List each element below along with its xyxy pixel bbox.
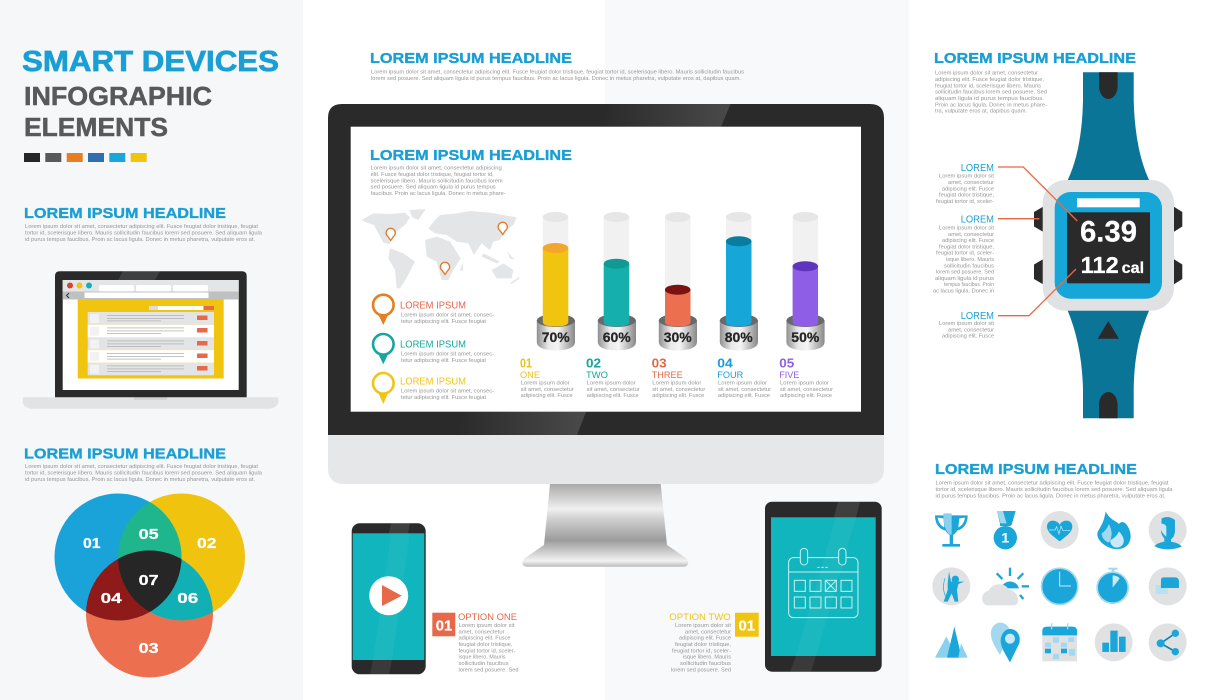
- bar 2: 60%: 02: [586, 356, 601, 370]
- bar 1: 70%: adipiscing elit. Fusce: [521, 393, 573, 399]
- option one: lorem sed posuere. Sed: [458, 667, 518, 673]
- monitor bezel: [328, 104, 884, 435]
- option one: amet, consectetur: [458, 629, 505, 635]
- bar 4: 80%: adipiscing elit. Fusce: [718, 393, 770, 399]
- option one: 01: [436, 618, 452, 634]
- bar 1: 70%: 70%: [542, 329, 570, 345]
- text block: icons section: tortor id, scelerisque libero. Mauris sollicitudin faucibus lorem sed posuere. Sed aliquam ligula: [936, 487, 1173, 493]
- text block: venn section: tortor id, scelerisque libero. Mauris sollicitudin faucibus lorem sed posuere. Sed aliquam ligula: [25, 470, 263, 476]
- option two: amet, consectetur: [685, 629, 731, 635]
- watch readout: cal: [1122, 260, 1144, 277]
- bar 5: 50%: Lorem ipsum dolor: [780, 380, 829, 386]
- text block: icons section: id purus tempus faucibus. Proin ac lacus ligula. Donec in metus pharetra, vulputate eros at.: [936, 494, 1166, 500]
- watch readout: [1080, 216, 1144, 278]
- callout text 2: sollicitudin faucibus: [944, 263, 994, 269]
- text block: smartwatch section: Proin ac lacus ligula. Donec in metus phare-: [935, 102, 1047, 108]
- text block: venn section: LOREM IPSUM HEADLINE: [24, 446, 226, 462]
- text block: smartwatch section: adipiscing elit. Fusce feugiat dolor tristique,: [935, 77, 1044, 83]
- venn diagram: 07: [139, 572, 159, 589]
- bar 3: 30%: Lorem ipsum dolor: [652, 380, 701, 386]
- monitor: [328, 104, 884, 567]
- text block: smartwatch section: aliquam ligula id purus tempus faucibus.: [935, 96, 1044, 102]
- callout text 3: Lorem ipsum dolor sit: [939, 321, 994, 327]
- text block: smartwatch section: feugiat tortor id, scelerisque libero. Mauris: [935, 83, 1041, 89]
- title: SMART DEVICES: [22, 46, 279, 78]
- screen heading: LOREM IPSUM HEADLINE: [370, 147, 572, 164]
- option one: adipiscing elit. Fusce: [458, 636, 510, 642]
- callout text 1: [936, 163, 994, 205]
- screen heading: elit. Fusce feugiat dolor tristique, feugiat tortor id,: [371, 172, 494, 178]
- option one: feugiat dolor tristique,: [458, 642, 513, 648]
- callout text 1: Lorem ipsum dolor sit: [939, 174, 994, 180]
- text block: laptop section: [24, 205, 263, 243]
- text block: smartwatch section: Lorem ipsum dolor sit amet, consectetur: [935, 71, 1038, 77]
- option two: [669, 612, 759, 673]
- callout text 1: amet, consectetur: [948, 180, 994, 186]
- bar 5: 50%: 05: [779, 356, 794, 370]
- callout text 2: tempus faucibus. Proin: [944, 282, 994, 288]
- callout text 2: adipiscing elit. Fusce: [942, 238, 994, 244]
- text block: laptop section: LOREM IPSUM HEADLINE: [24, 205, 226, 222]
- screen heading: Lorem ipsum dolor sit amet, consectetur adipiscing: [371, 166, 502, 172]
- text block: venn section: [24, 446, 263, 483]
- watch buttons: [1034, 207, 1182, 284]
- bar 3: 30%: sit amet, consectetur: [652, 387, 705, 393]
- text block: smartwatch section: tra, vulputate eros at, dapibus quam.: [935, 109, 1027, 115]
- callout text 1: feugiat dolor tristique,: [939, 193, 994, 199]
- callout text 3: amet, consectetur: [948, 327, 994, 333]
- bar 2: 60%: 60%: [603, 329, 631, 345]
- text block: monitor section: LOREM IPSUM HEADLINE: [370, 50, 572, 67]
- icon: clock: [1041, 567, 1079, 605]
- watch readout: 112: [1081, 252, 1119, 278]
- icon: flame: [1097, 511, 1131, 549]
- callout text 2: LOREM: [961, 214, 994, 226]
- bar 4: 80%: 04: [717, 356, 733, 370]
- callout text 3: adipiscing elit. Fusce: [942, 334, 994, 340]
- map pin: north america: [386, 228, 395, 240]
- icon: medal: [994, 511, 1017, 549]
- legend item: yellow: tetur adipiscing elit. Fusce feugiat: [401, 395, 486, 401]
- legend item: orange: LOREM IPSUM: [400, 300, 466, 312]
- callout lines: [998, 167, 1077, 316]
- screen heading: [370, 147, 572, 197]
- icon: stopwatch: [1096, 568, 1129, 604]
- option one: Lorem ipsum dolor sit: [458, 623, 515, 629]
- bar 1: 70%: 01: [520, 356, 532, 370]
- option two: 01: [738, 618, 755, 634]
- legend item: teal: LOREM IPSUM: [400, 340, 466, 350]
- icon grid: [932, 511, 1187, 662]
- screen heading: scelerisque libero. Mauris sollicitudin faucibus lorem: [371, 178, 503, 184]
- option two: feugiat dolor tristique,: [675, 642, 731, 648]
- watch strap: [1068, 72, 1149, 418]
- icon: weather: [982, 568, 1029, 605]
- venn diagram: 06: [177, 590, 198, 607]
- option two: lorem sed posuere. Sed: [671, 667, 731, 673]
- venn diagram: 02: [197, 535, 216, 552]
- bar 3: 30%: 30%: [664, 329, 692, 345]
- option two: feugiat tortor id, sceler-: [672, 648, 731, 654]
- laptop: [23, 271, 278, 409]
- text block: icons section: LOREM IPSUM HEADLINE: [935, 461, 1137, 478]
- text block: monitor section: Lorem ipsum dolor sit amet, consectetur adipiscing elit. Fusce feugiat dolor tristique, feugiat tortor id, scelerisque libero. Mauris sollicitudin faucibus: [371, 70, 744, 76]
- legend item: yellow: [373, 373, 494, 404]
- bar 4: 80%: [717, 212, 771, 399]
- option one: OPTION ONE: [458, 612, 517, 623]
- callout text 2: isque libero. Mauris: [946, 257, 994, 263]
- option one: [432, 612, 518, 673]
- bar 3: 30%: [652, 212, 705, 399]
- option two: OPTION TWO: [669, 612, 731, 623]
- text block: laptop section: Lorem ipsum dolor sit amet, consectetur adipiscing elit. Fusce feugiat dolor tristique, feugiat: [25, 224, 258, 230]
- callout text 1: LOREM: [961, 163, 994, 174]
- legend item: teal: tetur adipiscing elit. Fusce feugiat: [401, 358, 486, 364]
- bar 2: 60%: adipiscing elit. Fusce: [587, 393, 639, 399]
- bar 1: 70%: ONE: [520, 370, 540, 381]
- option one: feugiat tortor id, sceler-: [458, 648, 516, 654]
- option two: Lorem ipsum dolor sit: [675, 623, 731, 629]
- callout text 3: LOREM: [961, 311, 994, 322]
- text block: monitor section: lorem sed posuere. Sed aliquam ligula id purus tempus faucibus. Proin ac lacus ligula. Donec in metus pharetra, vulputate eros at, dapibus quam.: [371, 76, 741, 82]
- icon: calendar colour: [1042, 623, 1077, 661]
- venn diagram: 01: [83, 535, 100, 552]
- bar 3: 30%: adipiscing elit. Fusce: [652, 393, 704, 399]
- callout text 2: amet, consectetur: [948, 232, 994, 238]
- callout text 2: lorem sed posuere. Sed: [936, 270, 994, 276]
- title: ELEMENTS: [24, 112, 168, 142]
- callout text 2: Lorem ipsum dolor sit: [939, 226, 994, 232]
- option one: isque libero. Mauris: [458, 655, 506, 661]
- icon: play button: [369, 576, 408, 615]
- map pin: asia: [498, 222, 507, 234]
- bar 3: 30%: THREE: [652, 370, 683, 381]
- phone: [352, 523, 426, 674]
- title: [22, 46, 279, 142]
- callout text 3: [939, 311, 994, 340]
- bar 4: 80%: Lorem ipsum dolor: [718, 380, 767, 386]
- text block: monitor section: [370, 50, 744, 82]
- smartwatch: [1034, 72, 1182, 418]
- bar 1: 70%: Lorem ipsum dolor: [521, 380, 570, 386]
- legend item: yellow: Lorem ipsum dolor sit amet, consec-: [401, 388, 494, 394]
- text block: venn section: id purus tempus faucibus. Proin ac lacus ligula. Donec in metus pharetra, vulputate eros at.: [25, 477, 255, 483]
- callout text 1: adipiscing elit. Fusce: [942, 186, 994, 192]
- bar 5: 50%: sit amet, consectetur: [780, 387, 833, 393]
- bar 2: 60%: sit amet, consectetur: [587, 387, 640, 393]
- bar 4: 80%: 80%: [725, 329, 753, 345]
- watch body: [1043, 180, 1174, 311]
- bar 5: 50%: [779, 212, 833, 399]
- bar 5: 50%: 50%: [791, 329, 820, 345]
- icon: chat: [1149, 567, 1187, 605]
- bar 2: 60%: TWO: [586, 370, 608, 381]
- text block: smartwatch section: LOREM IPSUM HEADLINE: [934, 50, 1136, 67]
- screen heading: faucibus. Proin ac lacus ligula. Donec in metus phare-: [371, 191, 506, 197]
- bar 1: 70%: [520, 212, 575, 399]
- callout text 1: feugiat tortor id, sceler-: [936, 199, 994, 205]
- monitor stand: [522, 484, 688, 567]
- venn diagram: [54, 494, 245, 678]
- bar 4: 80%: FOUR: [717, 370, 743, 381]
- text block: smartwatch section: sollicitudin faucibus lorem sed posuere. Sed: [935, 90, 1047, 96]
- legend item: teal: Lorem ipsum dolor sit amet, consec-: [401, 352, 494, 358]
- option two: isque libero. Mauris: [683, 655, 731, 661]
- icon: runner: [932, 567, 970, 605]
- bar 2: 60%: [586, 212, 640, 399]
- legend item: orange: tetur adipiscing elit. Fusce feugiat: [401, 319, 486, 325]
- title: INFOGRAPHIC: [24, 81, 212, 111]
- icon: medal: 1: [1001, 530, 1009, 546]
- watch readout: 6.39: [1080, 216, 1137, 248]
- callout text 2: ac lacus ligula. Donec in: [933, 288, 994, 294]
- bar 1: 70%: sit amet, consectetur: [521, 387, 574, 393]
- option two: adipiscing elit. Fusce: [679, 636, 731, 642]
- legend item: orange: [373, 295, 494, 325]
- icon: person: [1149, 511, 1187, 549]
- text block: laptop section: id purus tempus faucibus. Proin ac lacus ligula. Donec in metus pharetra, vulputate eros at.: [25, 237, 255, 243]
- bar 4: 80%: sit amet, consectetur: [718, 387, 771, 393]
- icon: bar chart: [1095, 623, 1133, 661]
- monitor chin: [328, 435, 884, 484]
- icon: trophy: [935, 513, 968, 547]
- tablet: [765, 502, 882, 672]
- legend item: orange: Lorem ipsum dolor sit amet, consec-: [401, 312, 494, 318]
- text block: icons section: Lorem ipsum dolor sit amet, consectetur adipiscing elit. Fusce feugiat dolor tristique, feugiat: [936, 480, 1169, 486]
- icon: map pin: [991, 623, 1020, 662]
- venn diagram: 05: [139, 526, 159, 543]
- icon: mountains: [935, 627, 968, 658]
- monitor screen: [351, 127, 861, 412]
- legend item: yellow: LOREM IPSUM: [400, 376, 466, 388]
- bar 2: 60%: Lorem ipsum dolor: [587, 380, 636, 386]
- callout text 2: feugiat tortor id, sceler-: [936, 251, 994, 257]
- legend item: teal: [373, 334, 494, 364]
- text block: icons section: [935, 461, 1173, 500]
- callout text 2: feugiat dolor tristique,: [939, 244, 994, 250]
- callout text 2: [933, 214, 994, 294]
- screen heading: sed posuere. Sed aliquam ligula id purus tempus: [371, 185, 496, 191]
- venn diagram: 03: [139, 640, 159, 657]
- text block: venn section: Lorem ipsum dolor sit amet, consectetur adipiscing elit. Fusce feugiat dolor tristique, feugiat: [25, 464, 258, 470]
- option one: sollicitudin faucibus: [458, 661, 509, 667]
- icon: share: [1149, 623, 1187, 661]
- map pin: africa: [440, 262, 450, 274]
- venn diagram: 04: [101, 590, 123, 607]
- colour swatches: [24, 153, 147, 162]
- icon: calendar: [789, 548, 858, 618]
- option two: sollicitudin faucibus: [680, 661, 731, 667]
- bar 3: 30%: 03: [652, 356, 667, 370]
- text block: laptop section: tortor id, scelerisque libero. Mauris sollicitudin faucibus lorem sed posuere. Sed aliquam ligula: [25, 230, 263, 236]
- icon: heart rate: [1041, 511, 1079, 549]
- bar 5: 50%: FIVE: [779, 370, 799, 381]
- text block: smartwatch section: [934, 50, 1136, 115]
- world map: [362, 209, 520, 288]
- bar 5: 50%: adipiscing elit. Fusce: [780, 393, 832, 399]
- callout text 2: aliquam ligula id purus: [935, 276, 994, 282]
